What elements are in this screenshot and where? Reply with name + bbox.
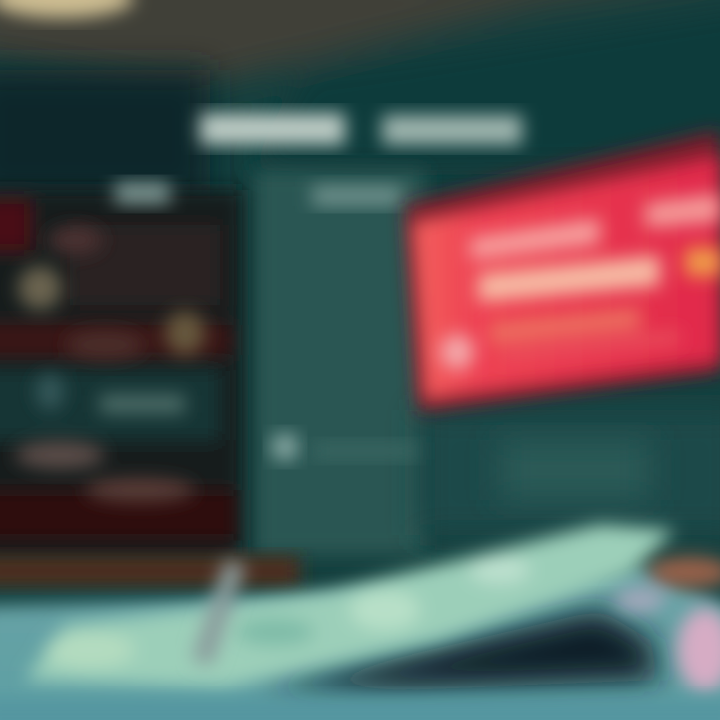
screen heading text (470, 193, 720, 302)
right objects (615, 556, 720, 692)
wood ledge (0, 556, 300, 586)
panel: lower right teal (420, 410, 720, 535)
panel: red screen (405, 130, 720, 412)
shadow under keyboard (260, 610, 660, 690)
upper left dark wall (0, 70, 210, 200)
pen (192, 560, 246, 665)
bullet text (312, 442, 417, 460)
screen rim (405, 130, 720, 412)
shelf objects (15, 226, 205, 502)
floor (0, 565, 720, 720)
bottom strip (0, 698, 720, 720)
ceiling (0, 0, 720, 175)
screen small text (440, 308, 680, 370)
subheadings (115, 182, 402, 206)
bullet icon (271, 433, 299, 461)
panel: center teal (255, 170, 425, 555)
title (200, 113, 522, 145)
ceiling light (0, 0, 134, 18)
panel: left shelf (0, 190, 242, 560)
lower right text (500, 440, 650, 500)
keyboard (25, 524, 675, 688)
